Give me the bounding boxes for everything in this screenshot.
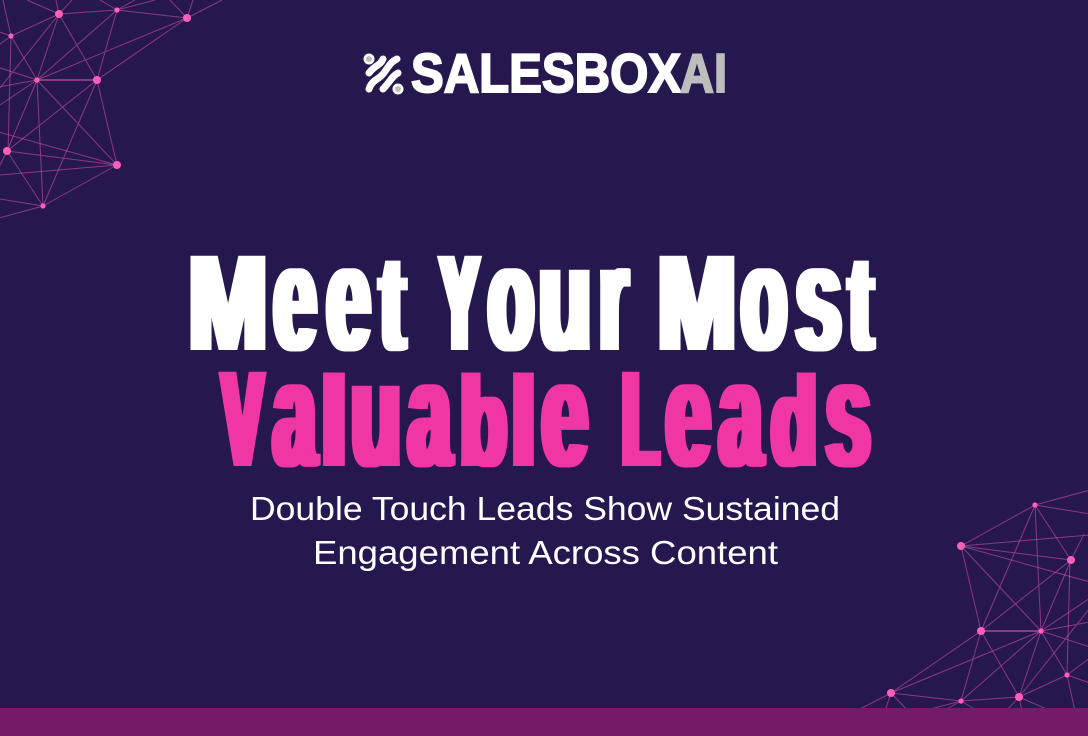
title line 1: Y: [440, 227, 479, 380]
title line 1: t: [849, 227, 873, 380]
title line 1: u: [539, 213, 591, 383]
title line 1: M: [658, 227, 736, 380]
title line 2: l: [321, 350, 347, 494]
title line 2: e: [666, 329, 710, 499]
title line 1: e: [274, 213, 316, 383]
title line 2: V: [222, 343, 263, 496]
title line 2: e: [542, 329, 587, 499]
title line 1: r: [600, 213, 627, 383]
title line 2: a: [719, 329, 762, 499]
title line 2: u: [351, 329, 401, 499]
title line 1: e: [327, 213, 370, 383]
title line 1: o: [742, 213, 786, 383]
logo: [364, 42, 727, 104]
logo icon: [364, 54, 404, 94]
title line 2: d: [772, 350, 816, 494]
subtitle: [250, 490, 840, 571]
title line 2: s: [826, 329, 870, 499]
network graphic: top left: [0, 0, 222, 221]
title line 2: b: [460, 350, 506, 494]
title line 2: l: [512, 350, 535, 494]
bottom bar: [0, 708, 1088, 736]
logo wordmark: SALESBOX: [411, 42, 681, 104]
subtitle: Double Touch Leads Show Sustained: [250, 490, 840, 527]
title line 2: a: [273, 329, 316, 499]
subtitle: Engagement Across Content: [313, 534, 778, 571]
title line 1: t: [380, 227, 405, 380]
title line 2: a: [408, 329, 451, 499]
title line 1: M: [189, 227, 267, 380]
title line 1: o: [488, 213, 534, 383]
title line 2: L: [622, 343, 658, 496]
network graphic: bottom right: [856, 490, 1088, 711]
title line 1: s: [796, 213, 841, 383]
logo AI suffix: AI: [680, 42, 727, 104]
